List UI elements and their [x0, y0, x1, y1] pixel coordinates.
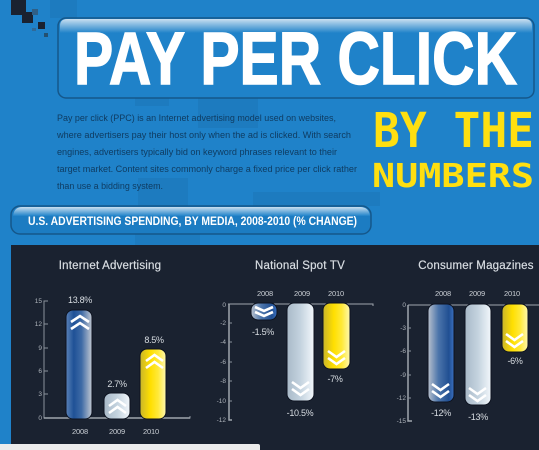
chart: National Spot TV: 2009 — [294, 289, 310, 298]
chart: Internet Advertising: 2010 — [143, 427, 159, 436]
chart: National Spot TV: 0 — [222, 302, 226, 309]
chart: National Spot TV: National Spot TV — [255, 260, 345, 272]
chart: Consumer Magazines: 2010 — [504, 289, 520, 298]
bar 2008 — [428, 304, 454, 402]
bar 2009 — [465, 304, 491, 405]
chart: National Spot TV: -2 — [220, 320, 226, 327]
intro paragraph: than use a bidding system. — [57, 181, 163, 192]
bar 2009 — [287, 303, 314, 401]
chart: National Spot TV: -10.5% — [287, 408, 314, 418]
chart: Consumer Magazines: -13% — [468, 412, 488, 422]
chart: National Spot TV: -6 — [220, 359, 226, 366]
chart: Internet Advertising: 8.5% — [144, 335, 164, 345]
section heading bar: U.S. ADVERTISING SPENDING, BY MEDIA, 2008-2010 (% CHANGE) — [28, 216, 357, 228]
intro paragraph: Pay per click (PPC) is an Internet advertising model used on websites, — [57, 113, 336, 124]
chart: Internet Advertising: 13.8% — [68, 295, 92, 305]
chart: Consumer Magazines: -3 — [400, 325, 406, 332]
intro paragraph: target market. Content sites commonly charge a fixed price per click rather — [57, 164, 358, 175]
chart: National Spot TV: 2010 — [328, 289, 344, 298]
chart: National Spot TV: 2008 — [257, 289, 273, 298]
chart: National Spot TV: -1.5% — [252, 327, 274, 337]
chart: Consumer Magazines: 0 — [402, 302, 406, 309]
chart: Internet Advertising: 15 — [35, 298, 42, 305]
chart: Internet Advertising: 9 — [38, 345, 42, 352]
subtitle: by the numbers — [372, 103, 534, 195]
chart: National Spot TV: -8 — [220, 378, 226, 385]
chart: Consumer Magazines: -15 — [397, 418, 406, 425]
chart: Consumer Magazines: 2008 — [435, 289, 451, 298]
bottom light strip — [0, 444, 260, 450]
bar 2008 — [66, 310, 92, 419]
intro paragraph: engines, advertisers typically bid on keyword phrases relevant to their — [57, 147, 338, 158]
chart: Consumer Magazines: 2009 — [469, 289, 485, 298]
chart: Internet Advertising: 2008 — [72, 427, 88, 436]
chart: Internet Advertising: 0 — [38, 415, 42, 422]
chart: Internet Advertising: 2.7% — [107, 379, 127, 389]
chart: Internet Advertising: 3 — [38, 391, 42, 398]
intro paragraph: where advertisers pay their host only when the ad is clicked. With search — [56, 130, 351, 141]
title banner — [58, 17, 534, 100]
bar 2010 — [323, 303, 350, 369]
subtitle: by the numbers: NUMBERS — [372, 156, 534, 195]
chart: Consumer Magazines: -12% — [431, 408, 451, 418]
bar 2008 — [251, 303, 277, 320]
chart: National Spot TV: -4 — [220, 339, 226, 346]
chart: Internet Advertising — [35, 260, 190, 436]
chart: National Spot TV: -7% — [327, 374, 343, 384]
bar 2010 — [140, 349, 166, 419]
chart: Consumer Magazines: -6% — [507, 356, 523, 366]
section heading bar — [11, 206, 371, 234]
decorative pixel squares — [11, 0, 48, 37]
chart: Consumer Magazines: -6 — [400, 348, 406, 355]
background patches — [50, 0, 380, 245]
intro paragraph — [56, 113, 358, 192]
chart: Consumer Magazines — [397, 260, 539, 425]
chart: National Spot TV: -10 — [217, 398, 226, 405]
bar 2009 — [104, 393, 130, 419]
chart: Internet Advertising: 12 — [35, 321, 42, 328]
bar 2010 — [502, 304, 528, 352]
chart: Internet Advertising: Internet Advertising — [59, 260, 161, 272]
chart: Internet Advertising: 2009 — [109, 427, 125, 436]
chart: Consumer Magazines: -9 — [400, 372, 406, 379]
chart: Consumer Magazines: Consumer Magazines — [418, 260, 534, 272]
chart: National Spot TV: -12 — [217, 417, 226, 424]
chart: Internet Advertising: 6 — [38, 368, 42, 375]
chart: National Spot TV — [217, 260, 373, 424]
chart: Consumer Magazines: -12 — [397, 395, 406, 402]
dark chart panel — [11, 245, 539, 450]
